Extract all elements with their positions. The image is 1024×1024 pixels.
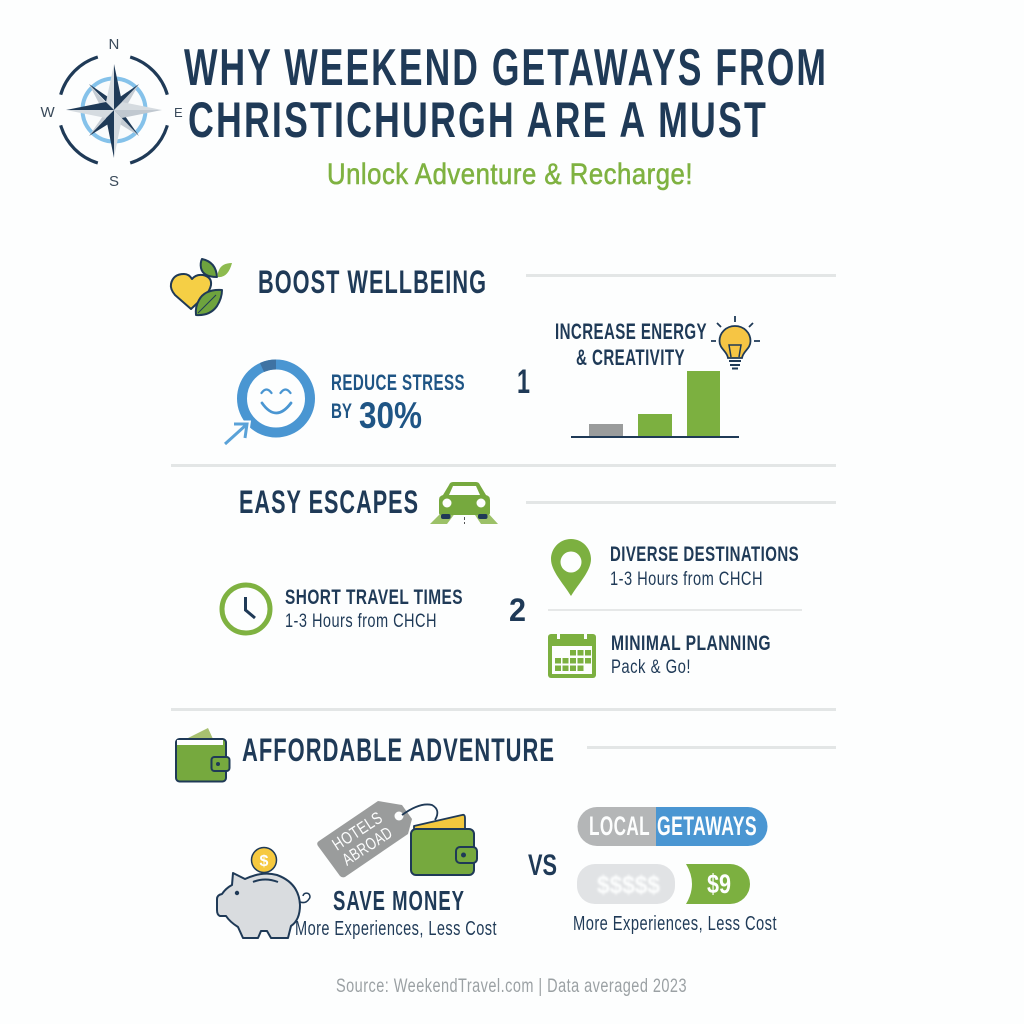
text: vs: VS [528, 849, 557, 882]
text: reduce stress by 30%: 30% [359, 395, 422, 436]
icon: hotels abroad price tag: HOTELS [329, 808, 386, 854]
icon: clock [222, 585, 270, 633]
section: boost wellbeing [171, 259, 836, 444]
text: increase energy and creativity [555, 319, 707, 370]
bar chart: energy rising [571, 371, 739, 438]
pill: price comparison: $9 [707, 869, 731, 899]
icon: wallet with yellow card [411, 815, 477, 875]
heading: easy escapes: EASY ESCAPES [239, 484, 419, 520]
text: minimal planning: MINIMAL PLANNING [611, 632, 771, 655]
icon: heart and leaves [171, 259, 232, 315]
section: affordable adventure [176, 728, 836, 940]
icon: hotels abroad price tag: ABROAD [339, 823, 396, 869]
icon: hotels abroad price tag [317, 801, 437, 877]
icon: calendar [548, 633, 596, 678]
text: save money: SAVE MONEY [333, 885, 465, 916]
icon: green wallet [176, 728, 230, 782]
title: CHRISTICHURGH ARE A MUST [188, 92, 768, 148]
text: minimal planning: Pack & Go! [611, 657, 691, 678]
number 1: 1 [517, 363, 530, 401]
icon: compass rose: E [174, 105, 183, 120]
icon: map pin [551, 539, 591, 596]
text: save money: More Experiences, Less Cost [295, 918, 497, 940]
title [184, 39, 828, 148]
icon: compass rose: N [108, 36, 119, 53]
pill: price comparison: $$$$$ [597, 871, 660, 899]
pill: local getaways [578, 807, 768, 846]
text: reduce stress by 30% [331, 370, 465, 436]
icon: piggy bank and coin [217, 848, 310, 938]
text: diverse destinations: DIVERSE DESTINATIONS [610, 543, 799, 566]
pill: price comparison [577, 864, 750, 904]
icon: compass rose: S [109, 173, 119, 190]
text: reduce stress by 30%: BY [331, 400, 352, 423]
number 2: 2 [509, 592, 526, 628]
text: short travel times [285, 586, 463, 632]
pill: local getaways: GETAWAYS [657, 811, 757, 841]
icon: smiley progress ring [225, 364, 310, 444]
text: save money [295, 885, 497, 940]
subtitle: Unlock Adventure & Recharge! [327, 158, 693, 191]
text: more experiences, less cost: More Experiences, Less Cost [573, 913, 777, 935]
text: short travel times: 1-3 Hours from CHCH [285, 611, 437, 632]
source note: Source: WeekendTravel.com | Data averaged 2023 [336, 976, 687, 997]
icon: car on road [430, 482, 498, 524]
text: short travel times: SHORT TRAVEL TIMES [285, 586, 463, 609]
icon: light bulb [711, 316, 760, 368]
text: minimal planning [611, 632, 771, 678]
pill: local getaways: LOCAL [589, 811, 650, 841]
heading: affordable adventure: AFFORDABLE ADVENTURE [242, 732, 555, 768]
text: increase energy and creativity: INCREASE ENERGY [555, 319, 707, 344]
icon: compass rose [40, 36, 183, 190]
heading: boost wellbeing: BOOST WELLBEING [258, 264, 487, 300]
text: diverse destinations: 1-3 Hours from CHCH [610, 569, 763, 590]
section: easy escapes [222, 482, 836, 678]
icon: piggy bank and coin: $ [260, 853, 268, 870]
text: increase energy and creativity: & CREATIVITY [576, 345, 685, 370]
text: reduce stress by 30%: REDUCE STRESS [331, 370, 465, 395]
icon: compass rose: W [40, 104, 56, 121]
text: diverse destinations [610, 543, 799, 590]
